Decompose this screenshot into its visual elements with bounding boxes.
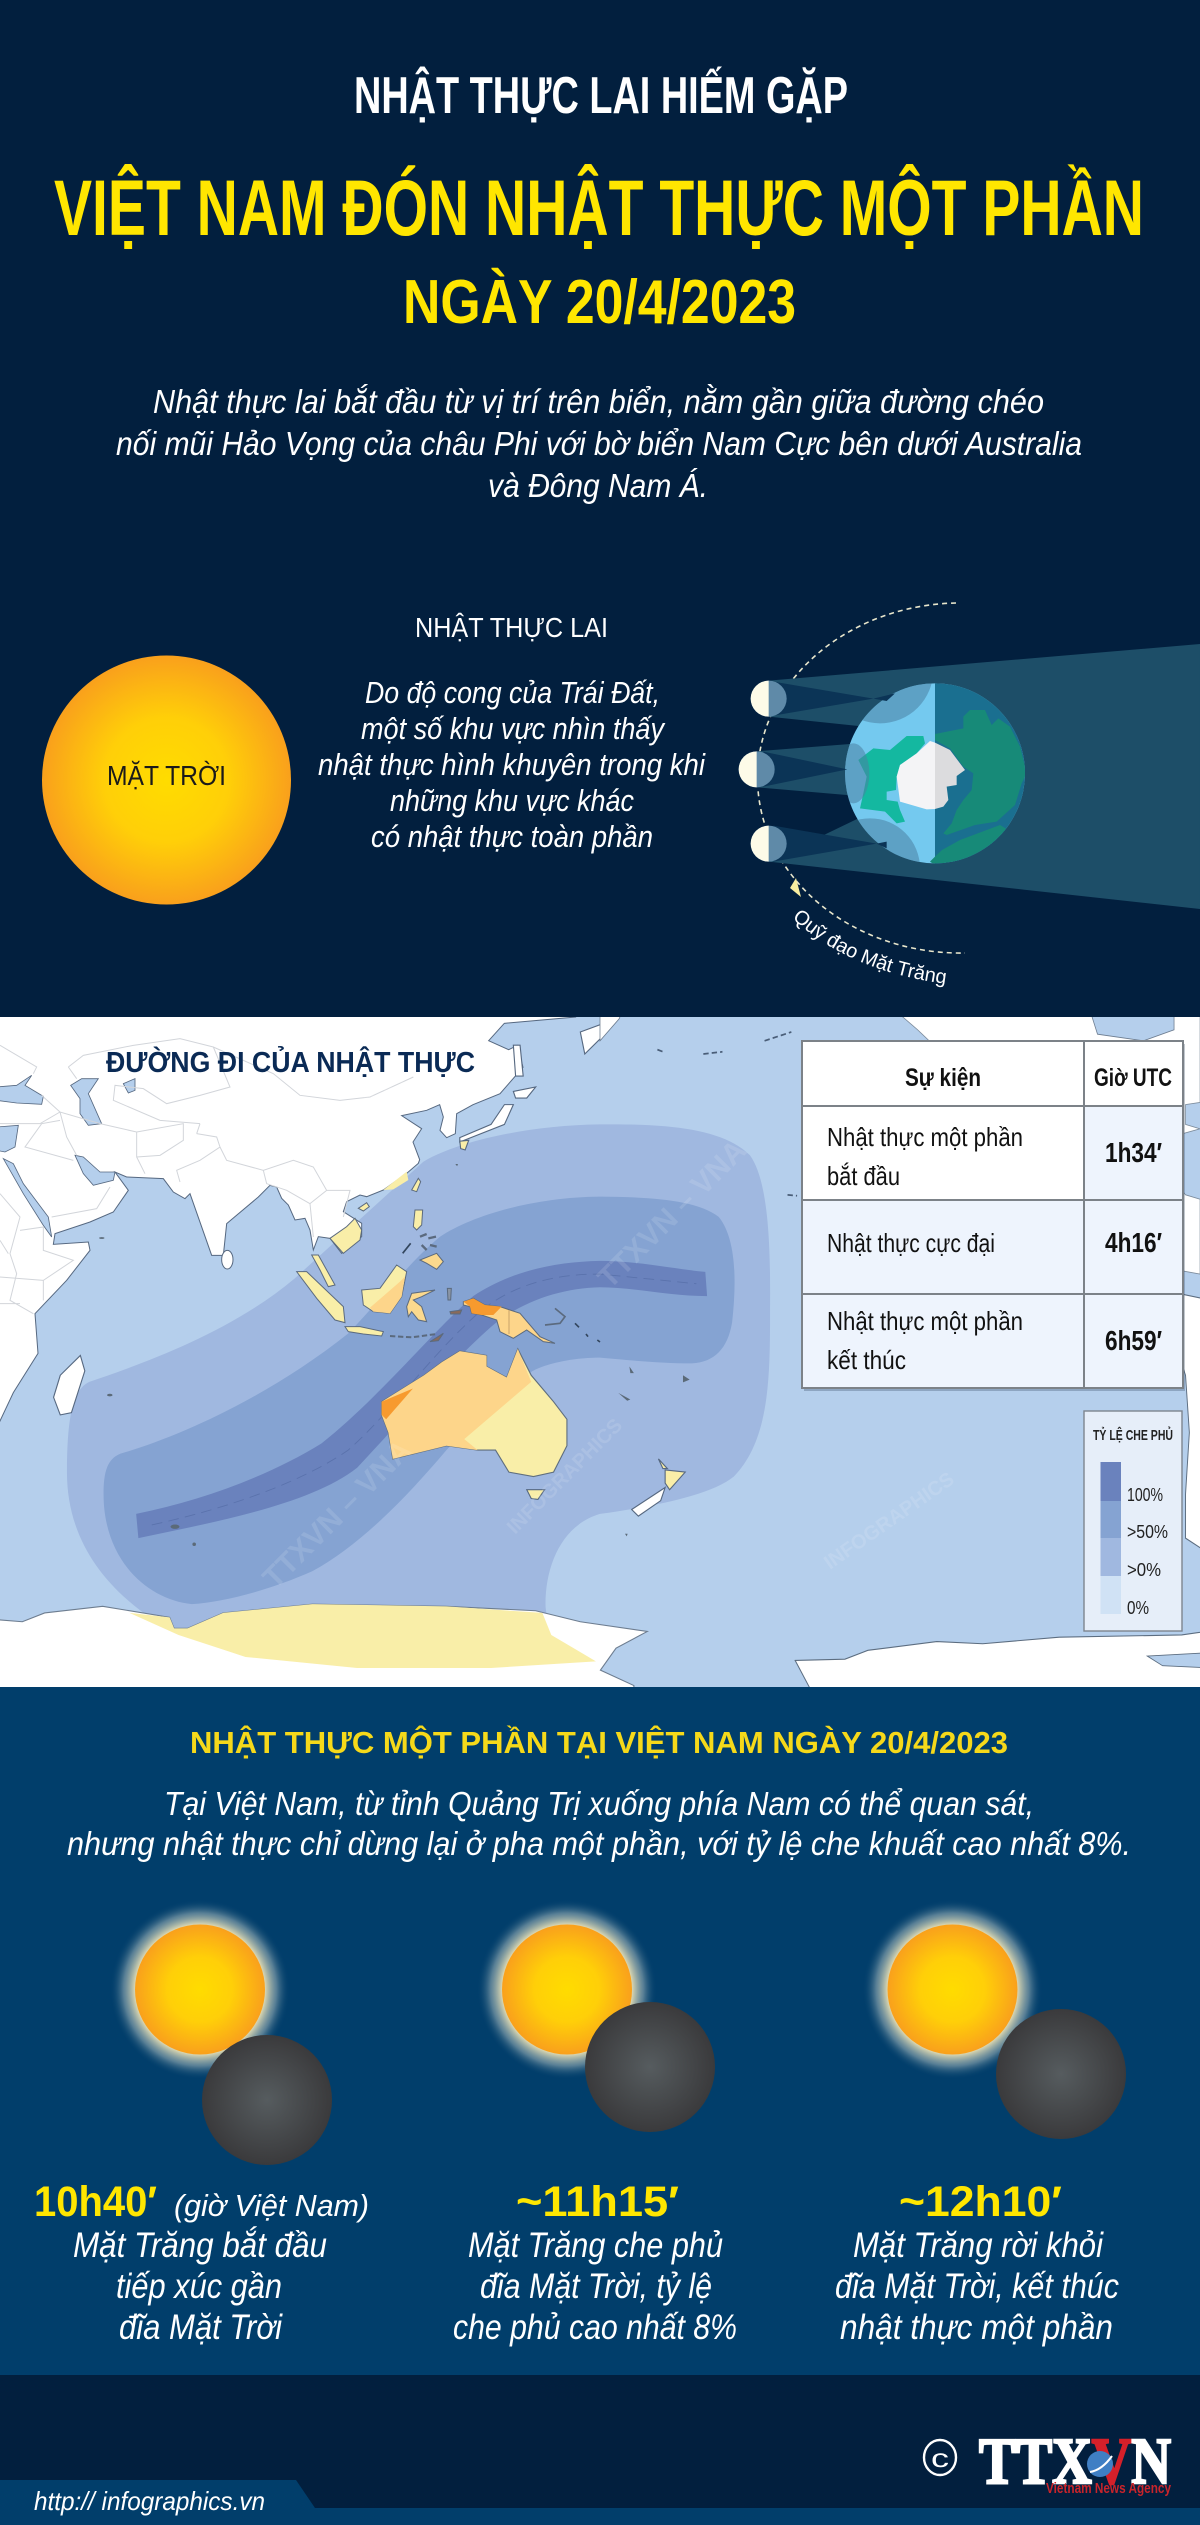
legend: coverage ratio: 0% [1127,1598,1149,1618]
title: kicker: NHẬT THỰC LAI HIẾM GẶP [354,66,848,125]
caption: stage 3 [835,2178,1119,2347]
caption: stage 2: ~11h15′ [516,2178,679,2226]
caption: stage 3: nhật thực một phần [840,2308,1113,2347]
hybrid eclipse explanation text: Do độ cong của Trái Đất, [365,675,660,710]
footer: source url: http:// infographics.vn [34,2486,265,2516]
caption: stage 1: Mặt Trăng bắt đầu [73,2226,327,2265]
icon: copyright: c [931,2443,949,2473]
table header: Giờ UTC [1094,1064,1172,1092]
table rows: 4h16′ [1105,1227,1162,1258]
caption: stage 3: ~12h10′ [899,2178,1062,2226]
table: eclipse timings [802,1041,1185,1391]
paragraph: Vietnam observation: nhưng nhật thực chỉ dừng lại ở pha một phần, với tỷ lệ che khuất cao nhất 8%. [67,1825,1131,1862]
title: date: NGÀY 20/4/2023 [403,268,796,337]
icon: moon top [751,681,787,717]
intro paragraph: nối mũi Hảo Vọng của châu Phi với bờ biển Nam Cực bên dưới Australia [116,425,1082,462]
caption: stage 2: đĩa Mặt Trời, tỷ lệ [480,2267,712,2306]
hybrid eclipse explanation text: có nhật thực toàn phần [371,819,653,854]
paragraph: Vietnam observation: Tại Việt Nam, từ tỉnh Quảng Trị xuống phía Nam có thể quan sát, [164,1785,1034,1822]
map: agency watermarks: TTXVN – VNA [257,1434,418,1595]
map: agency watermarks [257,995,958,1595]
caption: stage 1: (giờ Việt Nam) [174,2188,369,2223]
legend: coverage ratio: >0% [1127,1560,1161,1580]
diagram: earth, moons and shadow [738,602,1200,988]
shadow: umbra cones [763,682,895,862]
intro paragraph: Nhật thực lai bắt đầu từ vị trí trên biển, nằm gần giữa đường chéo [153,383,1044,420]
logo: TTXVN: TTXVN [979,2425,1171,2498]
arrow: orbit direction [790,878,801,897]
icon: earth [845,683,1025,864]
intro paragraph: và Đông Nam Á. [488,467,708,504]
footer [0,2375,1200,2525]
map: Antarctica [0,1604,649,1687]
map: >0% coverage zone [67,1124,770,1669]
paragraph: Vietnam observation [67,1785,1131,1862]
icon: eclipse stage 3 [862,1900,1126,2139]
icon: copyright [924,2440,956,2475]
label: moon orbit: Quỹ đạo Mặt Trăng [795,910,946,988]
table rows: 1h34′ [1105,1137,1162,1168]
icon: moon bottom [751,826,787,862]
map: >50% coverage zone [104,1197,735,1604]
legend: coverage ratio: >50% [1127,1522,1168,1542]
map: Southeast Asia islands [297,1172,600,1343]
caption: stage 1: tiếp xúc gần [116,2267,282,2306]
table rows: kết thúc [827,1345,906,1375]
map title: ĐƯỜNG ĐI CỦA NHẬT THỰC [106,1045,475,1079]
map: northern islands [54,1019,685,1516]
table header [905,1064,1172,1092]
caption: stage 2: Mặt Trăng che phủ [468,2226,723,2265]
panel: partial eclipse in Vietnam [0,1687,1200,2375]
map: agency watermarks: INFOGRAPHICS [820,1468,958,1574]
map: 100% totality band [136,1261,707,1538]
legend: coverage ratio: 100% [1127,1485,1163,1505]
map: Antarctica partial eclipse region [129,1604,596,1668]
map: Eurasia and Africa land [0,1010,576,1428]
map: Australia [382,1349,567,1477]
icon: eclipse stage 1 [110,1900,332,2165]
map: agency watermarks: TTXVN – VNA [350,995,480,1124]
table rows: Nhật thực một phần [827,1306,1023,1336]
hybrid eclipse explanation text: NHẬT THỰC LAI [415,612,608,643]
table rows: bắt đầu [827,1161,900,1191]
caption: stage 3: Mặt Trăng rời khỏi [853,2226,1104,2265]
caption: stage 2 [453,2178,737,2347]
shadow: penumbra cone [757,644,1200,909]
intro paragraph [116,383,1082,504]
map: eclipse path [0,995,1200,1714]
table rows: Nhật thực một phần [827,1122,1023,1152]
footer: url tab [0,2480,1200,2525]
table header: Sự kiện [905,1064,981,1092]
hybrid eclipse explanation text [318,612,706,854]
caption: stage 1: 10h40′ [34,2178,157,2226]
hybrid eclipse explanation text: những khu vực khác [390,783,634,818]
icon: sun with label [42,656,291,904]
hybrid eclipse explanation text: một số khu vực nhìn thấy [361,711,666,746]
caption: stage 3: đĩa Mặt Trời, kết thúc [835,2267,1119,2306]
legend: coverage ratio [1084,1411,1182,1631]
caption: stage 1: đĩa Mặt Trời [119,2308,283,2347]
icon: sun with label: MẶT TRỜI [107,760,226,791]
map: Americas [600,1010,1200,1697]
table rows: Nhật thực cực đại [827,1228,995,1258]
map: Sri Lanka [222,1250,233,1269]
background: top navy [0,0,1200,1017]
table rows: 6h59′ [1105,1325,1162,1356]
map: political borders [0,1039,413,1314]
hybrid eclipse explanation text: nhật thực hình khuyên trong khi [318,747,706,782]
caption: stage 2: che phủ cao nhất 8% [453,2308,737,2347]
table rows [827,1122,1162,1375]
icon: eclipse stage 2 [477,1900,715,2132]
title block [54,66,1144,337]
icon: moon middle [739,751,775,787]
heading: partial eclipse in Vietnam: NHẬT THỰC MỘT PHẦN TẠI VIỆT NAM NGÀY 20/4/2023 [190,1724,1008,1760]
map: agency watermarks: TTXVN – VNA [592,1134,753,1295]
caption: stage 1 [34,2178,369,2347]
map: inland seas [0,1075,135,1237]
map: agency watermarks: INFOGRAPHICS [503,1415,627,1539]
orbit: dashed moon path [758,603,965,953]
